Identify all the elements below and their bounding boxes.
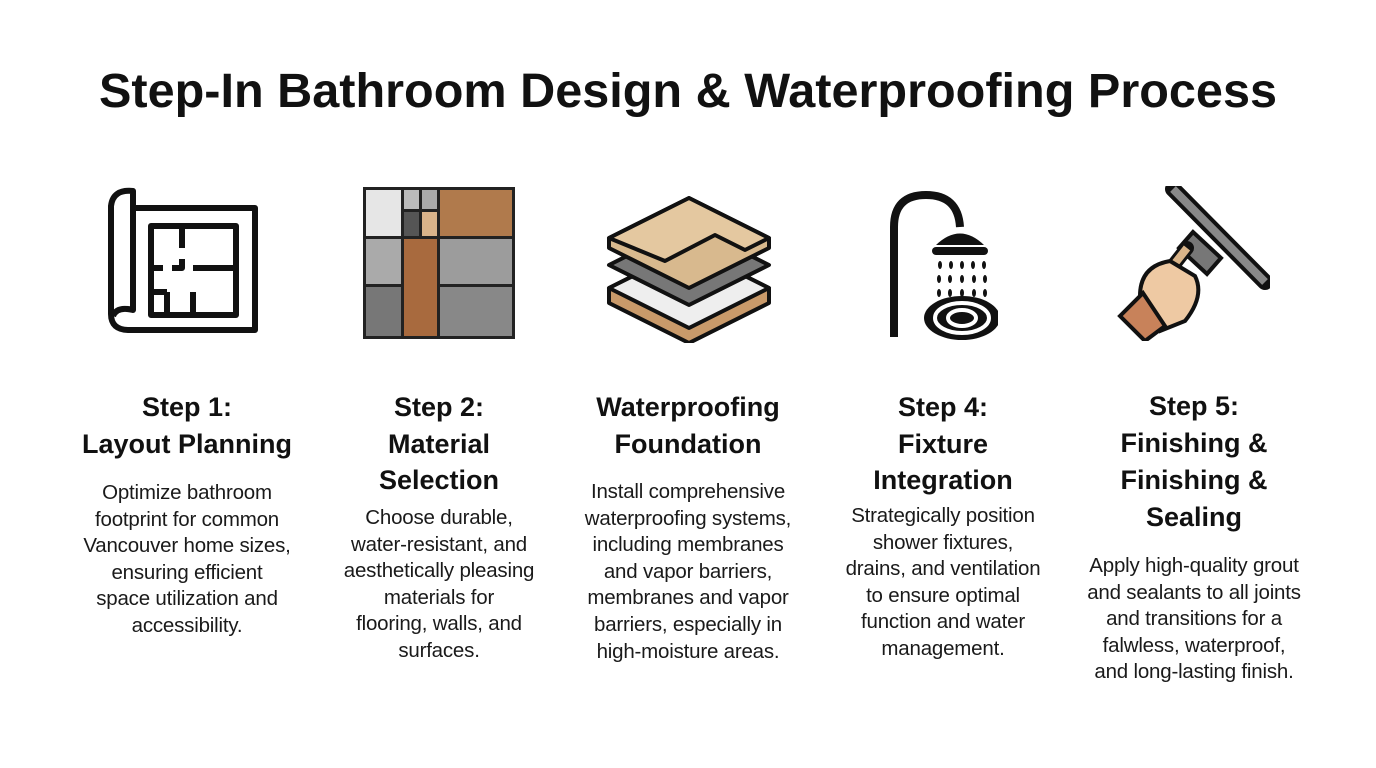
step 4 text bbox=[846, 504, 1040, 660]
step 4 text: Strategically position bbox=[851, 504, 1035, 527]
step 4 text: function and water bbox=[861, 610, 1025, 633]
step 2 text: Choose durable, bbox=[365, 506, 513, 529]
step 3 heading bbox=[596, 392, 780, 458]
step 1 text: space utilization and bbox=[96, 587, 278, 610]
step 2 text: surfaces. bbox=[398, 639, 480, 662]
step 5 text bbox=[1087, 554, 1301, 683]
step 2 text: flooring, walls, and bbox=[356, 612, 522, 635]
step 1 text: footprint for common bbox=[95, 508, 279, 531]
step 4 heading bbox=[873, 392, 1013, 495]
step 4 heading: Fixture bbox=[898, 428, 988, 458]
step 3 text: Install comprehensive bbox=[591, 480, 785, 503]
step 3 text: and vapor barriers, bbox=[604, 560, 772, 583]
step 1 text: accessibility. bbox=[132, 614, 242, 637]
step 2 text bbox=[344, 506, 534, 662]
step 5 heading: Finishing & bbox=[1120, 428, 1267, 458]
step 5 text: and long-lasting finish. bbox=[1094, 660, 1294, 683]
step 2 heading bbox=[379, 392, 499, 495]
step 4 text: management. bbox=[881, 637, 1005, 660]
step 1 heading: Step 1: bbox=[142, 392, 232, 422]
step 1 bbox=[82, 392, 292, 637]
step 3 heading: Waterproofing bbox=[596, 392, 780, 422]
step 3 text: waterproofing systems, bbox=[585, 507, 791, 530]
step 2 heading: Step 2: bbox=[394, 392, 484, 422]
step 2 text: water-resistant, and bbox=[351, 533, 527, 556]
step 5 text: and transitions for a bbox=[1106, 607, 1282, 630]
step 4 heading: Integration bbox=[873, 465, 1013, 495]
step 5 text: Apply high-quality grout bbox=[1089, 554, 1299, 577]
step 2 bbox=[344, 392, 534, 662]
step 3 text: barriers, especially in bbox=[594, 613, 782, 636]
step 3 text bbox=[584, 480, 791, 663]
step 1 text: Vancouver home sizes, bbox=[83, 534, 291, 557]
icon: shower and drain bbox=[890, 191, 998, 340]
icon: blueprint bbox=[108, 188, 258, 333]
step 2 text: materials for bbox=[384, 586, 494, 609]
step 1 heading: Layout Planning bbox=[82, 428, 292, 458]
step 4 bbox=[846, 392, 1040, 660]
step 1 text bbox=[83, 481, 291, 637]
icon: waterproof layers bbox=[606, 196, 772, 343]
step 5 heading bbox=[1120, 391, 1267, 532]
icon: hand with squeegee bbox=[1117, 186, 1270, 341]
step 5 heading: Sealing bbox=[1146, 502, 1242, 532]
step 5 heading: Step 5: bbox=[1149, 391, 1239, 421]
step 5 text: falwless, waterproof, bbox=[1103, 634, 1285, 657]
step 3 bbox=[584, 392, 791, 663]
step 2 heading: Material bbox=[388, 428, 490, 458]
step 5 heading: Finishing & bbox=[1120, 465, 1267, 495]
step 5 text: and sealants to all joints bbox=[1087, 581, 1301, 604]
step 2 text: aesthetically pleasing bbox=[344, 559, 534, 582]
step 3 text: including membranes bbox=[592, 533, 784, 556]
step 2 heading: Selection bbox=[379, 465, 499, 495]
step 4 text: shower fixtures, bbox=[873, 531, 1013, 554]
step 4 text: to ensure optimal bbox=[866, 584, 1020, 607]
step 4 heading: Step 4: bbox=[898, 392, 988, 422]
step 3 text: membranes and vapor bbox=[587, 586, 789, 609]
step 3 text: high-moisture areas. bbox=[597, 640, 779, 663]
step 5 bbox=[1087, 391, 1301, 683]
icon: material swatches bbox=[363, 187, 515, 339]
step 1 heading bbox=[82, 392, 292, 458]
step 3 heading: Foundation bbox=[615, 428, 761, 458]
title: Step-In Bathroom Design & Waterproofing Process bbox=[99, 65, 1277, 118]
step 4 text: drains, and ventilation bbox=[846, 557, 1040, 580]
step 1 text: ensuring efficient bbox=[111, 561, 262, 584]
step 1 text: Optimize bathroom bbox=[102, 481, 272, 504]
